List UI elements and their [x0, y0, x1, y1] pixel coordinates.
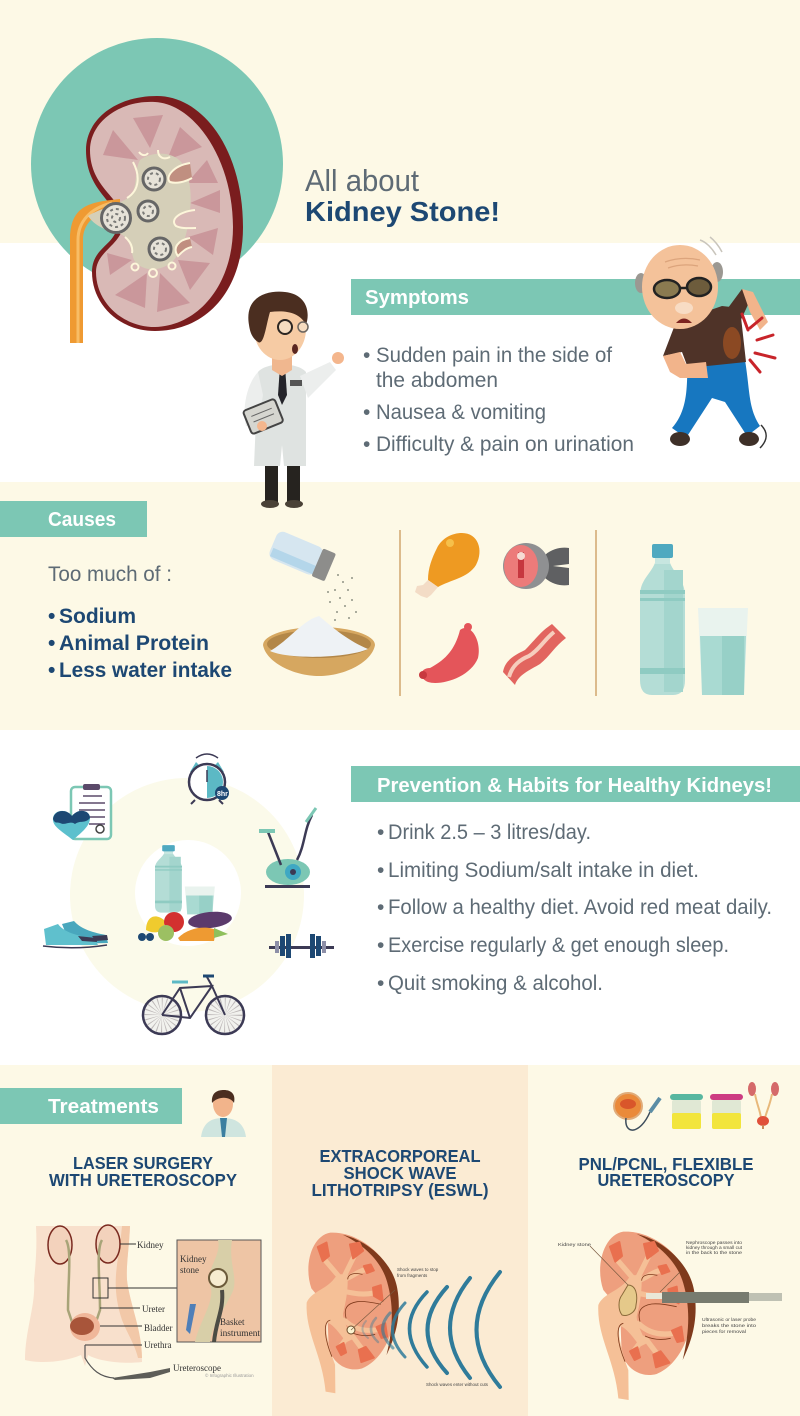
- anatomy labels: [137, 1240, 254, 1378]
- panel: symptoms: [351, 279, 800, 456]
- kidney inner tissue: [90, 102, 233, 327]
- calyx highlights: [125, 150, 196, 277]
- causes list: [48, 563, 232, 682]
- ureter: [70, 199, 120, 343]
- kidney stones: [102, 168, 171, 260]
- anatomy labels: © Infographic Illustration: [205, 1372, 254, 1378]
- anatomy labels: Bladder: [144, 1323, 172, 1333]
- head: [272, 350, 292, 376]
- pain marks: [742, 314, 775, 372]
- renal pelvis: [88, 154, 191, 269]
- anatomy labels: Urethra: [144, 1340, 171, 1350]
- prevention list: •: [377, 859, 384, 882]
- clipboard: [243, 399, 284, 434]
- symptoms list: Difficulty & pain on urination: [376, 433, 634, 456]
- symptoms list: •: [363, 344, 370, 367]
- causes list: Too much of :: [48, 563, 172, 586]
- shirt: [663, 306, 746, 368]
- prevention list: •: [377, 972, 384, 995]
- heading: treatments: [0, 1088, 182, 1124]
- inset: basket instrument: stone: [180, 1265, 199, 1275]
- icon: alarm clock 8hr: 8hr: [217, 791, 228, 798]
- treatment heading 1: [49, 1153, 237, 1190]
- icon: sausage: [419, 623, 479, 683]
- prevention list: •: [377, 934, 384, 957]
- heading: prevention: [351, 766, 800, 802]
- symptoms list: Sudden pain in the side of: [376, 344, 612, 367]
- habits ring: [70, 778, 304, 1012]
- causes list: •: [48, 632, 55, 655]
- renal pyramids: [103, 115, 220, 312]
- heading: treatments: Treatments: [48, 1096, 159, 1118]
- prevention list: Exercise regularly & get enough sleep.: [388, 934, 729, 957]
- anatomy labels: Ureter: [142, 1304, 165, 1314]
- trousers: [265, 462, 278, 502]
- icon: running shoes: [43, 921, 108, 948]
- icon: bicycle: [143, 976, 244, 1034]
- treatment heading 3: URETEROSCOPY: [598, 1170, 735, 1190]
- inset: basket instrument: Kidney: [180, 1254, 207, 1264]
- arms: [725, 289, 753, 324]
- head: [635, 273, 647, 293]
- icon: bacon: [503, 624, 566, 685]
- wave focus lines and captions: Shock waves enter without cuts: [426, 1382, 489, 1387]
- title: [305, 163, 500, 227]
- trousers: [672, 360, 760, 438]
- icon: kidney with stones: [31, 38, 283, 343]
- kidney cross-section: [307, 1233, 399, 1393]
- panel: treatments: [0, 1082, 782, 1400]
- causes list: •: [48, 659, 55, 682]
- symptoms list: Nausea & vomiting: [376, 401, 546, 424]
- icon: chicken leg: [415, 533, 480, 598]
- treatment heading 2: EXTRACORPOREAL: [320, 1146, 481, 1166]
- prevention list: Quit smoking & alcohol.: [388, 972, 603, 995]
- shoes: [670, 432, 690, 446]
- bladder: [70, 1313, 100, 1341]
- kidneys: [48, 1225, 120, 1264]
- title: All about: [305, 163, 419, 198]
- wave focus lines and captions: Shock waves to stop: [397, 1267, 439, 1272]
- captions: pieces for removal: [702, 1329, 746, 1334]
- icon: old man with back pain: [635, 237, 775, 448]
- lab coat: [254, 364, 306, 466]
- prevention list: •: [377, 821, 384, 844]
- captions: [558, 1240, 757, 1334]
- icon: exercise bike: [259, 808, 316, 888]
- treatment heading 2: [312, 1146, 488, 1200]
- heading: prevention: Prevention & Habits for Healthy Kidneys!: [377, 775, 772, 797]
- wave focus lines and captions: from fragments: [397, 1273, 428, 1278]
- treatment heading 2: LITHOTRIPSY (ESWL): [312, 1180, 488, 1200]
- inset: basket instrument: instrument: [220, 1328, 261, 1338]
- dividers: [399, 530, 401, 696]
- captions: Ultrasonic or laser probe: [702, 1317, 757, 1322]
- symptoms list: the abdomen: [376, 369, 498, 392]
- treatment heading 3: PNL/PCNL, FLEXIBLE: [578, 1154, 754, 1174]
- treatment heading 2: SHOCK WAVE: [344, 1163, 456, 1183]
- icon: ureteroscope, sample cups and urinary tract: [614, 1082, 779, 1130]
- anatomy labels: Ureteroscope: [173, 1363, 221, 1373]
- teal circle backdrop: [31, 38, 283, 290]
- stone: [619, 1285, 637, 1315]
- torso: [25, 1226, 142, 1366]
- captions: Nephroscope passes into: [686, 1240, 743, 1245]
- causes list: Sodium: [59, 605, 136, 628]
- icon: water glass: [698, 608, 748, 695]
- treatment heading 1: WITH URETEROSCOPY: [49, 1170, 237, 1190]
- prevention list: Drink 2.5 – 3 litres/day.: [388, 821, 591, 844]
- captions: breaks the stone into: [702, 1323, 757, 1328]
- kidney cross-section: [598, 1232, 696, 1400]
- inset: basket instrument: Basket: [220, 1317, 245, 1327]
- title: Kidney Stone!: [305, 196, 500, 227]
- icon: doctor: [243, 292, 344, 508]
- icon: dumbbell: [269, 934, 334, 958]
- kidney body: [86, 96, 243, 331]
- treatment heading 1: LASER SURGERY: [73, 1153, 213, 1173]
- icon: bottle, glass and vegetables: [138, 845, 233, 941]
- leader lines and ureteroscope: [85, 1244, 177, 1345]
- captions: Kidney stone: [558, 1242, 592, 1247]
- causes list: Animal Protein: [59, 632, 209, 655]
- icon: small doctor: [201, 1090, 246, 1137]
- captions: kidney through a small cut: [686, 1245, 743, 1250]
- ureters: [66, 1240, 102, 1322]
- inset: basket instrument: [177, 1240, 261, 1342]
- wave focus lines and captions: [351, 1267, 489, 1387]
- diagram: shock wave lithotripsy: [307, 1233, 500, 1393]
- nephroscope: [646, 1292, 782, 1303]
- prevention list: •: [377, 896, 384, 919]
- stone: [347, 1326, 355, 1334]
- heading: symptoms: Symptoms: [365, 287, 469, 309]
- causes list: Less water intake: [59, 659, 232, 682]
- symptoms list: •: [363, 433, 370, 456]
- symptoms list: •: [363, 401, 370, 424]
- symptoms list: [363, 344, 634, 456]
- panel: causes: [0, 501, 748, 696]
- diagram: ureteroscopy anatomy: [25, 1225, 261, 1380]
- anatomy labels: Kidney: [137, 1240, 164, 1250]
- heading: causes: Causes: [48, 509, 116, 531]
- diagram: percutaneous nephrolithotomy: [558, 1232, 782, 1400]
- shock waves: [362, 1272, 500, 1387]
- icon: fish steak: [503, 543, 569, 589]
- heading: symptoms: [351, 279, 800, 315]
- icon: water bottle: [640, 544, 685, 695]
- panel: prevention and habits: [43, 754, 800, 1034]
- divider 2: [595, 530, 597, 696]
- prevention list: Follow a healthy diet. Avoid red meat daily.: [388, 896, 772, 919]
- icon: alarm clock 8hr: [189, 754, 229, 804]
- icon: clipboard and heart: [53, 784, 111, 840]
- prevention list: Limiting Sodium/salt intake in diet.: [388, 859, 699, 882]
- prevention list: [377, 821, 772, 995]
- icon: salt shaker and bowl: [263, 530, 375, 676]
- heading: causes: [0, 501, 147, 537]
- captions: in the back to the stone: [686, 1250, 743, 1255]
- causes list: •: [48, 605, 55, 628]
- treatment heading 3: [578, 1154, 754, 1190]
